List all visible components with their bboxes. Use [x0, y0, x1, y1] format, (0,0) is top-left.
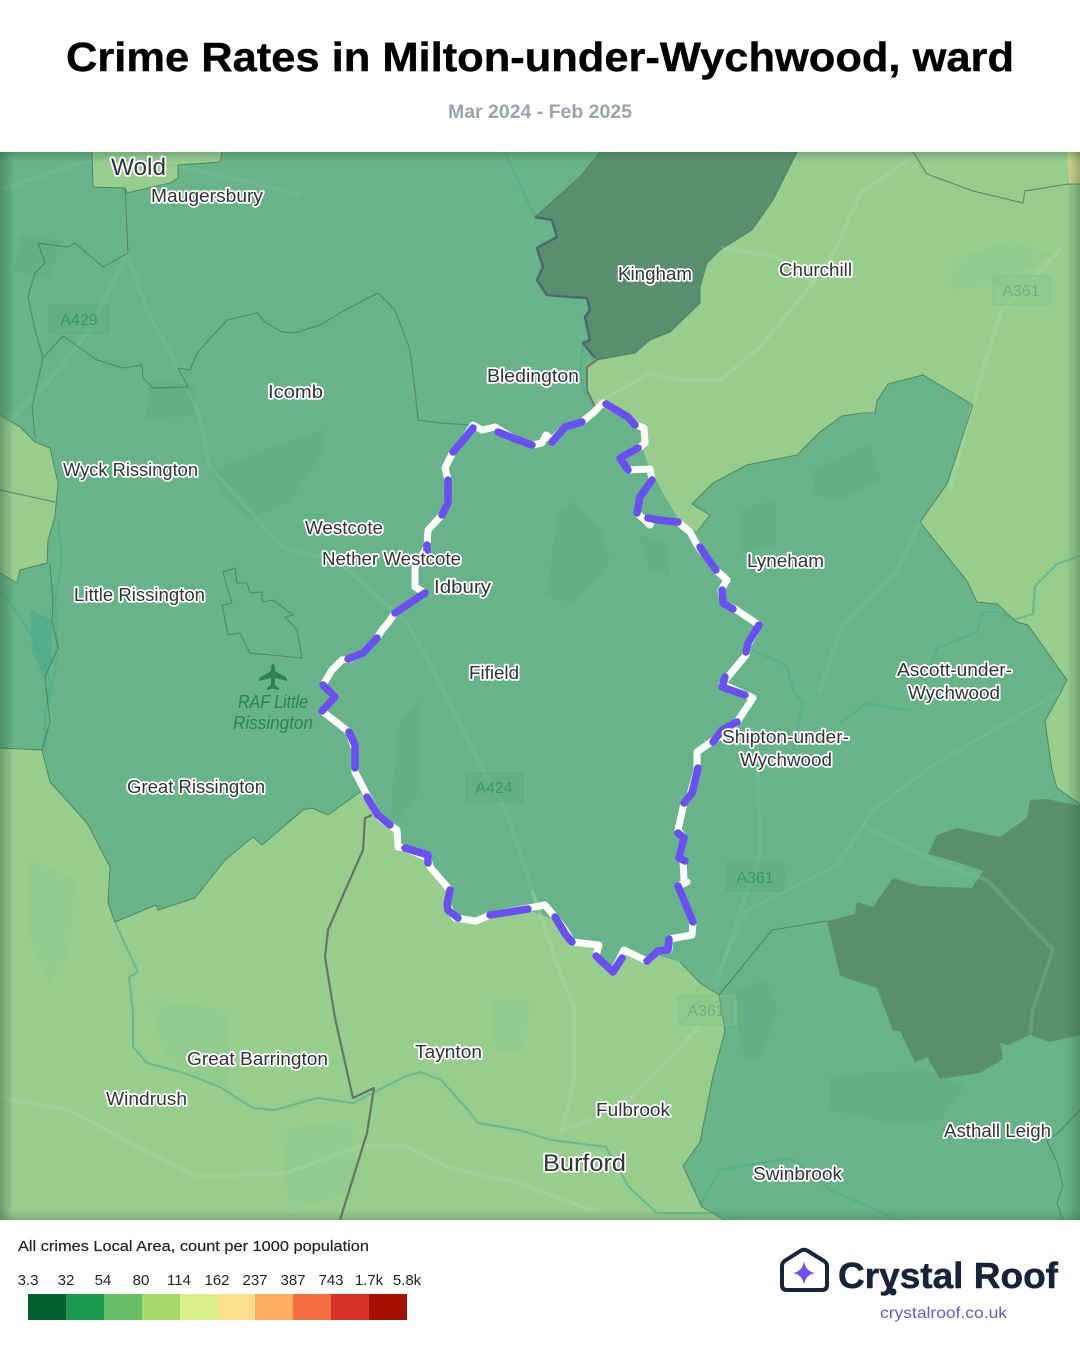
place: Ascott-under-Wychwood: Wychwood	[908, 683, 1000, 703]
legend tick labels: 32	[58, 1272, 74, 1289]
title: Crime Rates in Milton-under-Wychwood, ward	[66, 34, 1014, 80]
legend tick labels: 80	[133, 1272, 149, 1289]
place: Shipton-under-Wychwood	[722, 727, 849, 770]
road sign: A361 south: A361	[687, 1003, 725, 1020]
place: Asthall Leigh: Asthall Leigh	[944, 1121, 1051, 1141]
legend tick labels: 5.8k	[393, 1272, 422, 1289]
logo url: crystalroof.co.uk	[880, 1305, 1008, 1322]
legend tick labels: 1.7k	[355, 1272, 384, 1289]
logo wordmark: Crystal Roof	[838, 1255, 1059, 1296]
place: Burford: Burford	[543, 1150, 626, 1177]
map label: RAF Little Rissington: RAF Little	[238, 692, 308, 712]
road sign: A424: A424	[475, 780, 513, 797]
region: Wychwood forest high band	[827, 799, 1080, 1079]
icon: airfield plane	[259, 664, 287, 690]
place labels	[63, 154, 1051, 1184]
rivers	[0, 152, 1080, 1220]
place: Fulbrook: Fulbrook	[596, 1100, 671, 1120]
place: Swinbrook: Swinbrook	[753, 1164, 843, 1184]
place: Idbury: Idbury	[434, 577, 491, 597]
place: Fifield: Fifield	[469, 663, 519, 683]
legend	[18, 1238, 422, 1320]
region: north-east corner	[1067, 152, 1080, 184]
region boundary lines	[0, 152, 1080, 1220]
place: Maugersbury: Maugersbury	[151, 186, 263, 206]
legend colour scale	[28, 1294, 407, 1320]
legend title: All crimes Local Area, count per 1000 population	[18, 1238, 369, 1255]
logo: Crystal Roof	[782, 1250, 1059, 1322]
road sign: A429	[50, 306, 108, 334]
vignette	[0, 152, 12, 1220]
map label: RAF Little Rissington	[233, 692, 313, 733]
region: west low crime pocket	[0, 415, 58, 583]
place: Shipton-under-Wychwood: Wychwood	[740, 750, 832, 770]
place: Bledington: Bledington	[487, 366, 579, 386]
road sign: A361 north: A361	[1002, 283, 1040, 300]
place: Nether Westcote: Nether Westcote	[322, 549, 461, 569]
place: Great Rissington: Great Rissington	[127, 777, 265, 797]
place: Icomb: Icomb	[268, 382, 323, 402]
region: south low crime area	[0, 748, 725, 1220]
place: Shipton-under-Wychwood: Shipton-under-	[722, 727, 849, 747]
icon: house with star	[782, 1250, 827, 1290]
road sign: A361 south	[678, 996, 736, 1025]
place: Lyneham: Lyneham	[747, 551, 824, 571]
place: Great Barrington: Great Barrington	[187, 1049, 328, 1069]
legend tick labels: 237	[242, 1272, 268, 1289]
place: Little Rissington: Little Rissington	[74, 585, 205, 605]
subtitle: date range: Mar 2024 - Feb 2025	[448, 102, 632, 123]
ward boundary: Milton-under-Wychwood	[322, 403, 759, 972]
legend tick labels: 114	[167, 1272, 191, 1289]
icon: key drop under y	[890, 1288, 896, 1296]
legend tick labels: 387	[280, 1272, 306, 1289]
road sign: A424	[466, 773, 523, 802]
road sign: A361 centre: A361	[736, 870, 774, 887]
legend tick labels: 162	[204, 1272, 230, 1289]
legend tick labels: 743	[318, 1272, 344, 1289]
place: Westcote: Westcote	[305, 518, 383, 538]
woodland patches	[15, 235, 1050, 1210]
legend tick labels: 3.3	[18, 1272, 38, 1289]
region: north-east low crime area	[587, 152, 1080, 804]
roads	[0, 155, 1063, 1210]
place: Wyck Rissington: Wyck Rissington	[63, 460, 198, 480]
place: Windrush: Windrush	[106, 1089, 187, 1109]
place: Churchill: Churchill	[779, 260, 852, 280]
legend tick labels	[18, 1272, 422, 1289]
choropleth map	[0, 152, 1080, 1220]
map label: RAF Little Rissington: Rissington	[233, 713, 313, 733]
region: Kingham high band	[535, 152, 797, 360]
place: Kingham: Kingham	[618, 264, 692, 284]
place: Ascott-under-Wychwood	[897, 660, 1012, 703]
road sign: A361 north	[993, 276, 1051, 305]
place: Taynton: Taynton	[415, 1042, 482, 1062]
region: ward fill	[380, 412, 650, 966]
road sign: A361 centre	[726, 862, 784, 891]
place: Ascott-under-Wychwood: Ascott-under-	[897, 660, 1012, 680]
region: Wold	[92, 152, 222, 193]
place: Wold: Wold	[111, 154, 166, 181]
road sign: A429: A429	[60, 312, 98, 329]
legend tick labels: 54	[95, 1272, 111, 1289]
